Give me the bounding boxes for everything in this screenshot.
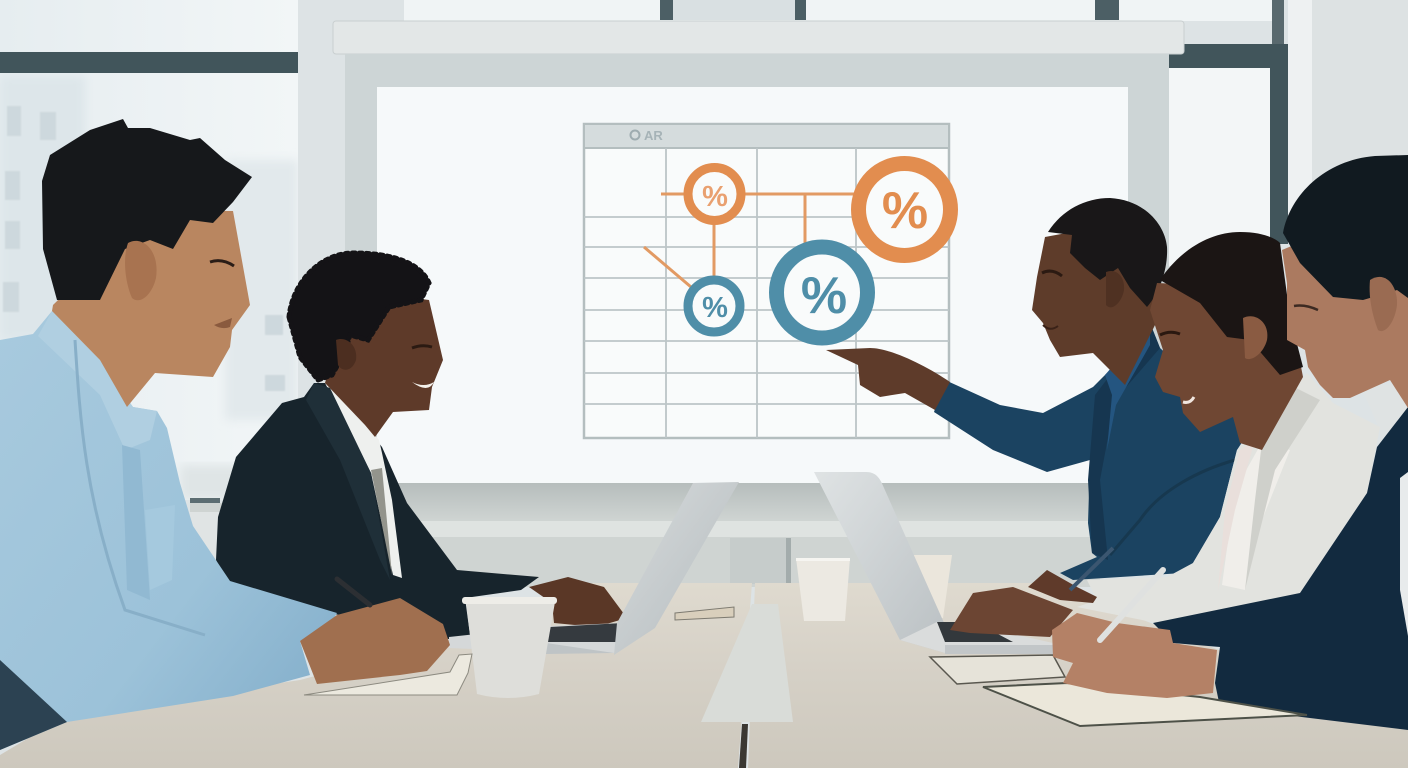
ear: [336, 339, 356, 370]
hair: [289, 253, 429, 380]
screen surface: [377, 87, 1128, 483]
table chart on screen: [584, 124, 950, 438]
presenter suit: [934, 323, 1250, 580]
small notebook on table: [675, 607, 734, 620]
notebook under left hand: [304, 654, 472, 695]
percent circle: small orange: [688, 168, 741, 220]
wall column: [298, 0, 346, 520]
paper cup centre: [796, 558, 850, 621]
hand on laptop: [529, 577, 627, 627]
laptop left: [449, 482, 739, 655]
person: woman in front right: [1153, 155, 1408, 730]
face and neck: [52, 210, 250, 407]
lower wall and ledge: [190, 503, 1100, 587]
hair: [42, 119, 252, 300]
presenter hair: [1048, 198, 1167, 307]
percent circle: large orange: %: [882, 182, 928, 240]
screen housing: [333, 21, 1184, 54]
person: presenter pointing: [826, 198, 1250, 580]
white blazer woman ear: [1243, 316, 1267, 359]
person: young man in dark suit: [216, 253, 627, 640]
percent circle: large teal: [776, 247, 868, 338]
projection screen: [333, 21, 1184, 537]
white blazer woman hair: [1160, 232, 1303, 375]
table: [0, 583, 1408, 768]
person: man with light blue shirt: [0, 119, 450, 750]
hands front: [1052, 613, 1217, 698]
person: woman in white blazer: [1077, 232, 1380, 623]
percent circle: small teal: [688, 280, 740, 332]
table chart on screen: AR: [644, 128, 663, 143]
right window: [1168, 0, 1288, 266]
right wall: [1288, 0, 1408, 225]
left window with building: [0, 0, 298, 503]
front woman hair: [1283, 155, 1408, 300]
white blazer woman face: [1150, 283, 1303, 450]
placket and pocket: [122, 445, 150, 600]
notebook right front: [983, 683, 1307, 726]
head: [325, 295, 443, 437]
notebook right centre: [930, 655, 1065, 684]
percent circle: large orange: [858, 164, 950, 256]
front paper cup: [462, 597, 557, 698]
top window strip: [404, 0, 1274, 21]
hands: [300, 598, 450, 684]
presenter hand: [826, 348, 950, 410]
hands right: [950, 570, 1097, 637]
connector lines: [644, 194, 855, 287]
paper cup right: [910, 555, 952, 618]
laptop right: [814, 472, 1053, 654]
percent circle: small teal: %: [702, 292, 728, 324]
pens right: [1070, 548, 1163, 640]
collar: [38, 311, 157, 450]
presenter ear: [1106, 271, 1124, 307]
table centre inlay: [701, 604, 793, 722]
percent circle: large teal: %: [801, 267, 847, 325]
ear: [125, 241, 157, 300]
front woman ear: [1370, 277, 1397, 331]
dark lower garment: [0, 660, 67, 750]
screen surround: [345, 54, 1169, 522]
shirt: [0, 311, 337, 750]
percent circle: small orange: %: [702, 181, 728, 213]
front woman face: [1282, 230, 1408, 408]
pen: [337, 579, 370, 605]
presenter head: [1032, 232, 1160, 385]
suit: [216, 383, 539, 640]
